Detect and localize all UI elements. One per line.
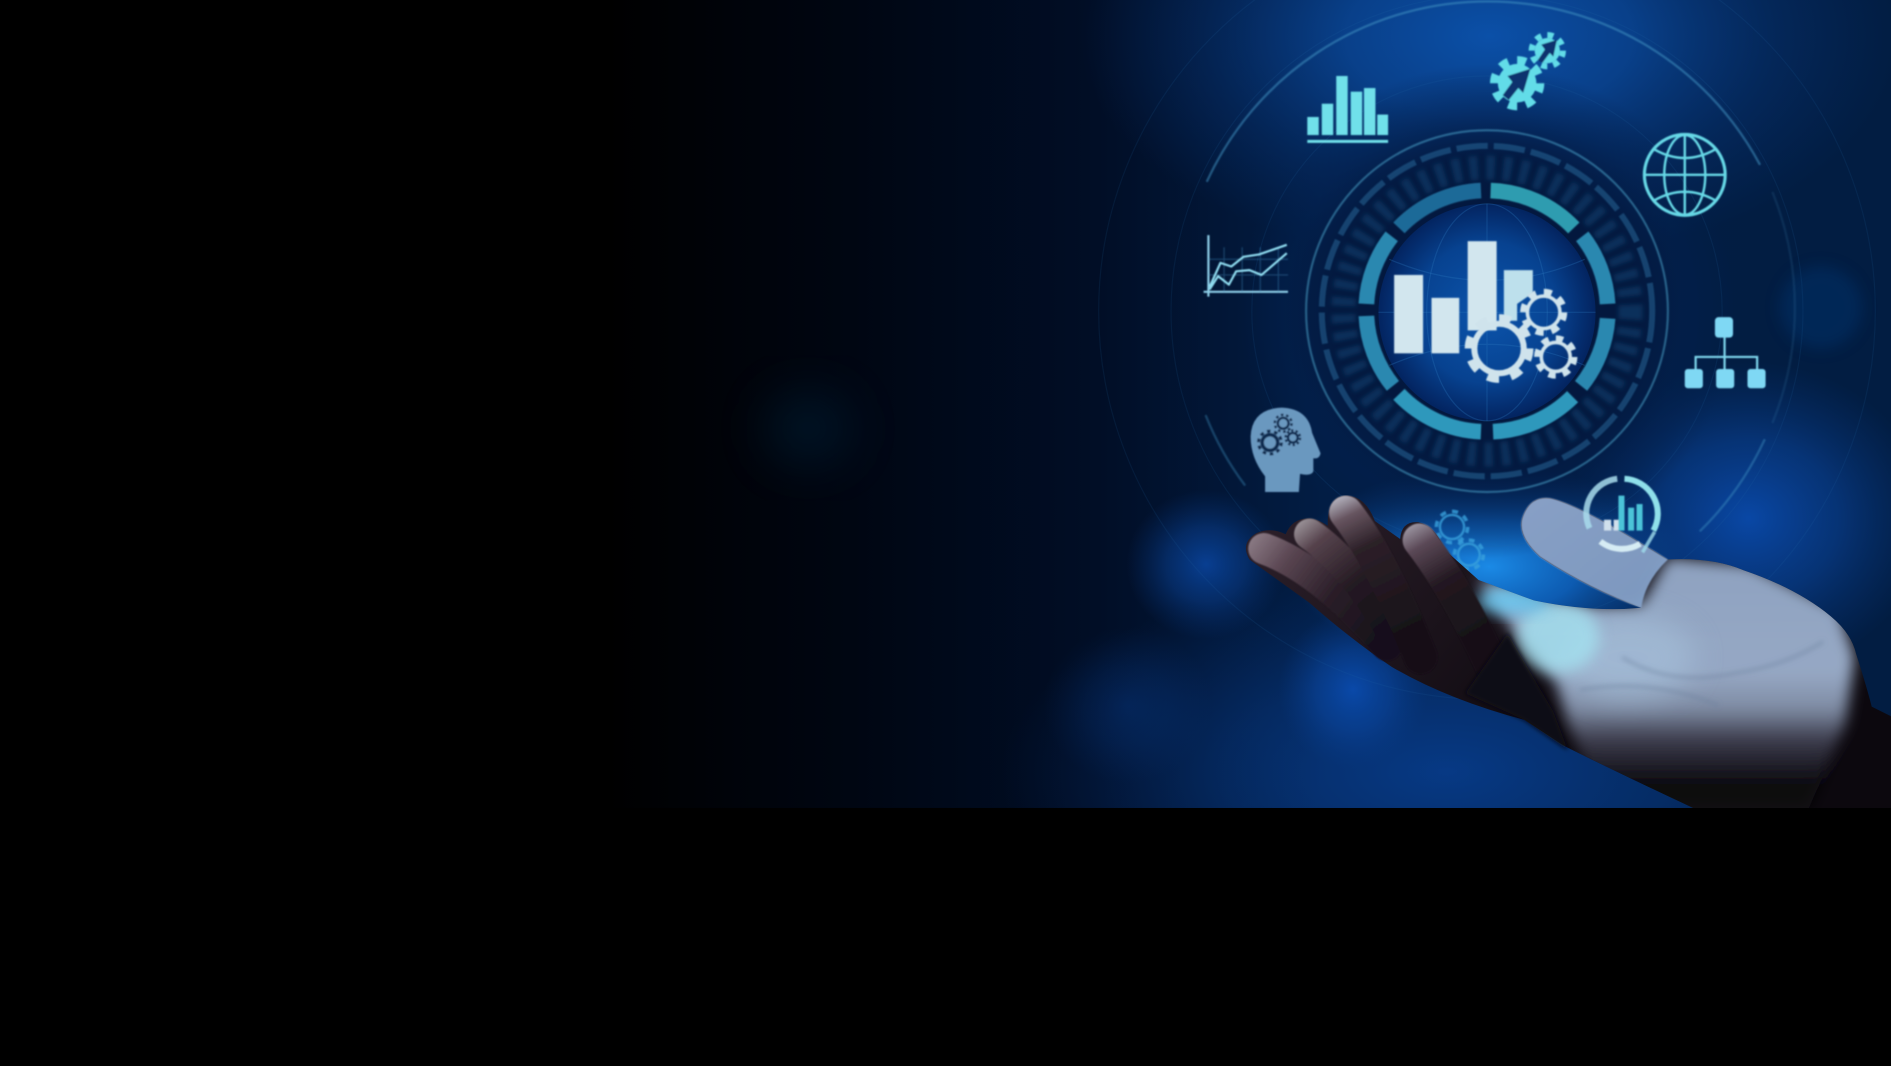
- hand silhouette: [1246, 496, 1891, 808]
- icon: faint gears above palm: [1436, 511, 1483, 569]
- dashed ring: [1322, 146, 1652, 476]
- background gradient: [714, 0, 1891, 808]
- palm bright spot: [1517, 601, 1599, 673]
- radial tick ring: [1343, 168, 1631, 455]
- photo area: [714, 0, 1891, 808]
- globe lines inside disk: [1378, 204, 1596, 421]
- fingers: [1264, 512, 1501, 687]
- middle finger: [1346, 512, 1421, 657]
- pinky: [1264, 549, 1387, 645]
- glow: above the palm: [1324, 486, 1667, 609]
- hand: [1246, 479, 1891, 808]
- central disk: [1378, 204, 1596, 421]
- large gear: [1469, 318, 1529, 379]
- dark ring backing: [1346, 74, 1628, 553]
- hologram rings: [1099, 0, 1875, 699]
- upper gear: [1523, 292, 1564, 333]
- hero illustration: [714, 0, 1891, 808]
- palm highlight: [1476, 557, 1855, 808]
- small gear: [1532, 35, 1563, 66]
- palm lighter centre: [1562, 615, 1694, 699]
- icon: bar chart: [1307, 76, 1388, 143]
- lower gear: [1537, 338, 1574, 376]
- glow: bokeh far left: [765, 392, 851, 464]
- glow: bokeh lower centre: [1290, 624, 1414, 750]
- icon: head with gears: [1251, 408, 1321, 492]
- faint outer circles: [1099, 0, 1875, 699]
- glow: bokeh left of hand: [1134, 497, 1275, 630]
- lit palm, clipped to the hand: [1476, 557, 1855, 808]
- icon: globe: [1644, 134, 1725, 215]
- wrist shadow: [1465, 633, 1568, 750]
- ring finger: [1310, 534, 1393, 633]
- index finger: [1419, 540, 1501, 687]
- central gears: [1469, 292, 1574, 379]
- large gear: [1494, 60, 1540, 106]
- icon: org chart: [1685, 317, 1766, 388]
- glow: top of hologram: [1114, 0, 1849, 200]
- large outer arcs: [1206, 1, 1795, 531]
- glow: bokeh lower left: [1064, 648, 1183, 760]
- thin inner circle: [1306, 130, 1668, 492]
- glow: right side: [1600, 378, 1891, 632]
- thumb: [1521, 498, 1668, 608]
- palm creases: [1580, 642, 1823, 705]
- icon: gears with arrows: [1494, 35, 1563, 106]
- donut icon over thumb: [1586, 479, 1658, 552]
- icon: line chart: [1204, 235, 1288, 297]
- glow: lower field: [1048, 608, 1693, 808]
- palm cyan edge: [1477, 586, 1550, 615]
- teal segmented ring: [1366, 191, 1608, 432]
- central bar chart: [1394, 241, 1533, 353]
- glow: bokeh right edge: [1780, 266, 1862, 348]
